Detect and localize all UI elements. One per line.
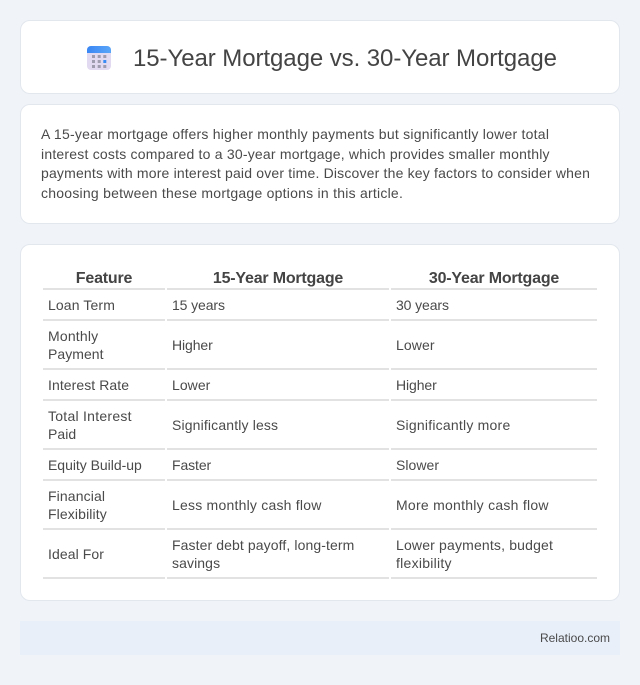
intro text: interest costs compared to a 30-year mortgage, which provides smaller monthly bbox=[41, 146, 550, 162]
title: 15-Year Mortgage vs. 30-Year Mortgage bbox=[133, 45, 557, 72]
panel: introduction bbox=[20, 104, 620, 224]
row: equity build-up bbox=[43, 457, 597, 481]
table header: 15-Year Mortgage bbox=[213, 270, 343, 287]
row: loan term bbox=[43, 297, 597, 321]
row: monthly payment bbox=[43, 328, 597, 370]
intro text: A 15-year mortgage offers higher monthly payments but significantly lower total bbox=[41, 126, 549, 142]
intro text bbox=[41, 126, 590, 201]
row: ideal for: Ideal For bbox=[48, 546, 104, 562]
row: total interest paid: Significantly less bbox=[172, 417, 278, 433]
row: loan term: Loan Term bbox=[48, 297, 115, 313]
footer bar bbox=[20, 621, 620, 655]
row: equity build-up: Faster bbox=[172, 457, 211, 473]
row: ideal for: Lower payments, budget bbox=[396, 537, 553, 553]
row: monthly payment: Higher bbox=[172, 337, 213, 353]
row: interest rate bbox=[43, 377, 597, 401]
row: interest rate: Higher bbox=[396, 377, 437, 393]
row: monthly payment: Lower bbox=[396, 337, 435, 353]
row: ideal for: savings bbox=[172, 555, 220, 571]
row: monthly payment: Payment bbox=[48, 346, 104, 362]
row: equity build-up: Equity Build-up bbox=[48, 457, 142, 473]
table header: Feature bbox=[76, 270, 132, 287]
table header: 30-Year Mortgage bbox=[429, 270, 559, 287]
row: financial flexibility: Less monthly cash flow bbox=[172, 497, 322, 513]
table header bbox=[43, 270, 597, 290]
row: financial flexibility bbox=[43, 488, 597, 530]
panel: comparison table bbox=[20, 244, 620, 601]
title panel bbox=[20, 20, 620, 94]
row: interest rate: Lower bbox=[172, 377, 210, 393]
row: total interest paid bbox=[43, 408, 597, 450]
row: ideal for: flexibility bbox=[396, 555, 452, 571]
intro text: choosing between these mortgage options in this article. bbox=[41, 185, 403, 201]
icon: calendar bbox=[87, 46, 111, 70]
row: total interest paid: Total Interest bbox=[48, 408, 132, 424]
row: total interest paid: Significantly more bbox=[396, 417, 510, 433]
row: loan term: 15 years bbox=[172, 297, 225, 313]
row: financial flexibility: Flexibility bbox=[48, 506, 107, 522]
row: financial flexibility: More monthly cash flow bbox=[396, 497, 549, 513]
row: interest rate: Interest Rate bbox=[48, 377, 129, 393]
row: ideal for: Faster debt payoff, long-term bbox=[172, 537, 354, 553]
row: loan term: 30 years bbox=[396, 297, 449, 313]
row: total interest paid: Paid bbox=[48, 426, 76, 442]
footer brand text: Relatioo.com bbox=[540, 631, 610, 645]
row: financial flexibility: Financial bbox=[48, 488, 105, 504]
row: monthly payment: Monthly bbox=[48, 328, 98, 344]
intro text: payments with more interest paid over time. Discover the key factors to consider when bbox=[41, 165, 590, 181]
row: equity build-up: Slower bbox=[396, 457, 439, 473]
